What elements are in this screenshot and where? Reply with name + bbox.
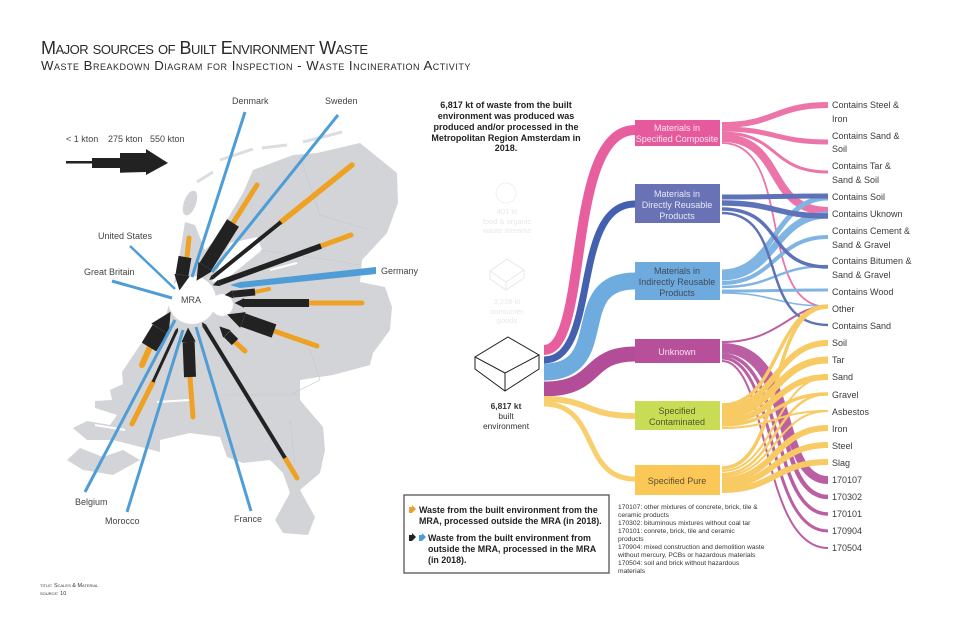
scale legend arrow: 275 kton [108,134,143,144]
map country labels: MRA [181,295,201,305]
sankey target labels: Contains Sand & [832,131,900,141]
waste code key [617,504,765,575]
waste code key: products [618,536,644,543]
faded food waste stream [482,183,531,235]
waste code key: 170107: other mixtures of concrete, brick, tile & [618,504,758,511]
sankey target labels: Sand & Gravel [832,270,891,280]
sankey first stage [544,130,635,479]
node: directly reusable: Materials in [654,189,700,199]
built environment label [483,401,530,431]
sankey target labels: Contains Sand [832,321,891,331]
blue inbound flows [85,112,376,512]
scale legend arrow [66,134,185,175]
map country labels: Morocco [105,516,140,526]
icon: built environment box [475,337,539,391]
sankey flows from dark blue [722,196,828,325]
legend box: outside the MRA, processed in the MRA [428,544,597,554]
sankey target labels: Steel [832,441,853,451]
faded food waste stream: food & organic [483,217,531,226]
sankey target labels: Iron [832,424,848,434]
sankey target labels: Sand & Gravel [832,240,891,250]
faded food waste stream: 401 kt [497,207,518,216]
sankey target labels: Soil [832,338,847,348]
headline statement: produced and/or processed in the [433,122,579,132]
faded consumer goods stream: 3,228 kt [494,297,521,306]
map of the Netherlands [67,132,398,535]
node: specified contaminated: Specified [658,406,696,416]
sankey target labels [832,100,912,553]
sankey target labels: Contains Soil [832,192,885,202]
sankey target labels: 170302 [832,492,862,502]
black inbound arrows [149,222,321,458]
node: directly reusable [635,184,720,223]
waste code key: 170904: mixed construction and demolition waste [618,544,765,551]
waste code key: 170504: soil and brick without hazardous [618,560,740,567]
sankey target labels: Contains Uknown [832,209,903,219]
built environment label: built [498,411,514,421]
footer source note [40,583,99,597]
legend box: (in 2018). [428,555,466,565]
map country labels [75,96,419,526]
headline statement: 6,817 kt of waste from the built [440,100,572,110]
waste code key: 170302: bituminous mixtures without coal tar [618,520,751,527]
orange outbound flows [132,165,362,478]
node: indirectly reusable: Products [659,288,695,298]
sankey target labels: Contains Cement & [832,226,910,236]
waste code key: ceramic products [618,512,670,519]
map country labels: Belgium [75,497,108,507]
sankey target labels: Other [832,304,855,314]
sankey target labels: Asbestos [832,407,870,417]
headline statement [431,100,581,153]
built environment label: environment [483,421,530,431]
sankey target labels: Sand [832,372,853,382]
sankey target labels: Gravel [832,390,859,400]
legend box: Waste from the built environment from [428,533,591,543]
sankey target labels: Contains Steel & [832,100,899,110]
waste code key: materials [618,568,646,575]
node: directly reusable: Products [659,211,695,221]
map country labels: Great Britain [84,267,135,277]
sankey target labels: Contains Bitumen & [832,256,912,266]
node: specified pure [635,465,720,495]
headline statement: Metropolitan Region Amsterdam in [431,133,581,143]
map country labels: United States [98,231,153,241]
map country labels: Sweden [325,96,358,106]
footer source note: source: 10 [40,591,66,597]
faded consumer goods stream: consumer [491,307,524,316]
built environment label: 6,817 kt [491,401,522,411]
scale legend arrow: 550 kton [150,134,185,144]
waste code key: without mercury, PCBs or hazardous materials [617,552,756,559]
node: unknown [635,339,720,363]
node: specified pure: Specified Pure [648,476,706,486]
headline statement: 2018. [495,143,517,153]
legend box [404,495,609,573]
sankey target labels: 170504 [832,543,862,553]
sankey target labels: Sand & Soil [832,175,879,185]
map country labels: Denmark [232,96,269,106]
legend box: Waste from the built environment from the [419,505,598,515]
waste code key: 170101: conrete, brick, tile and ceramic [618,528,735,535]
sankey target labels: Slag [832,458,850,468]
sankey flows to pink targets [722,105,828,307]
faded food waste stream: waste streams [482,226,531,235]
node: indirectly reusable [635,262,720,300]
map country labels: France [234,514,262,524]
sankey target labels: 170107 [832,475,862,485]
faded consumer goods stream [490,259,524,325]
sankey target labels: Contains Tar & [832,161,891,171]
node: specified contaminated: Contaminated [649,417,705,427]
sankey target labels: 170904 [832,526,862,536]
node: specified composite [635,120,720,146]
node: specified composite: Materials in [654,123,700,133]
subtitle: Waste Breakdown Diagram for Inspection - Waste Incineration Activity [41,58,471,73]
node: directly reusable: Directly Reusable [642,200,712,210]
faded consumer goods stream: goods [497,316,517,325]
sankey target labels: Tar [832,355,845,365]
sankey target labels: Iron [832,114,848,124]
node: specified contaminated [635,401,720,430]
headline statement: environment was produced was [438,111,574,121]
scale legend arrow: < 1 kton [66,134,98,144]
node: specified composite: Specified Composite [636,134,718,144]
sankey flows from light blue [722,198,828,306]
node: indirectly reusable: Indirectly Reusable [639,277,715,287]
sankey flows to purple codes [722,306,828,548]
sankey target labels: 170101 [832,509,862,519]
title: Major sources of Built Environment Waste [41,38,368,58]
legend box: MRA, processed outside the MRA (in 2018). [419,516,602,526]
sankey target labels: Soil [832,144,847,154]
footer source note: title: Scales & Material [40,583,99,589]
node: unknown: Unknown [658,347,696,357]
sankey target labels: Contains Wood [832,287,893,297]
sankey flows from contaminated and pure [722,306,828,490]
node: indirectly reusable: Materials in [654,266,700,276]
map country labels: Germany [381,266,419,276]
